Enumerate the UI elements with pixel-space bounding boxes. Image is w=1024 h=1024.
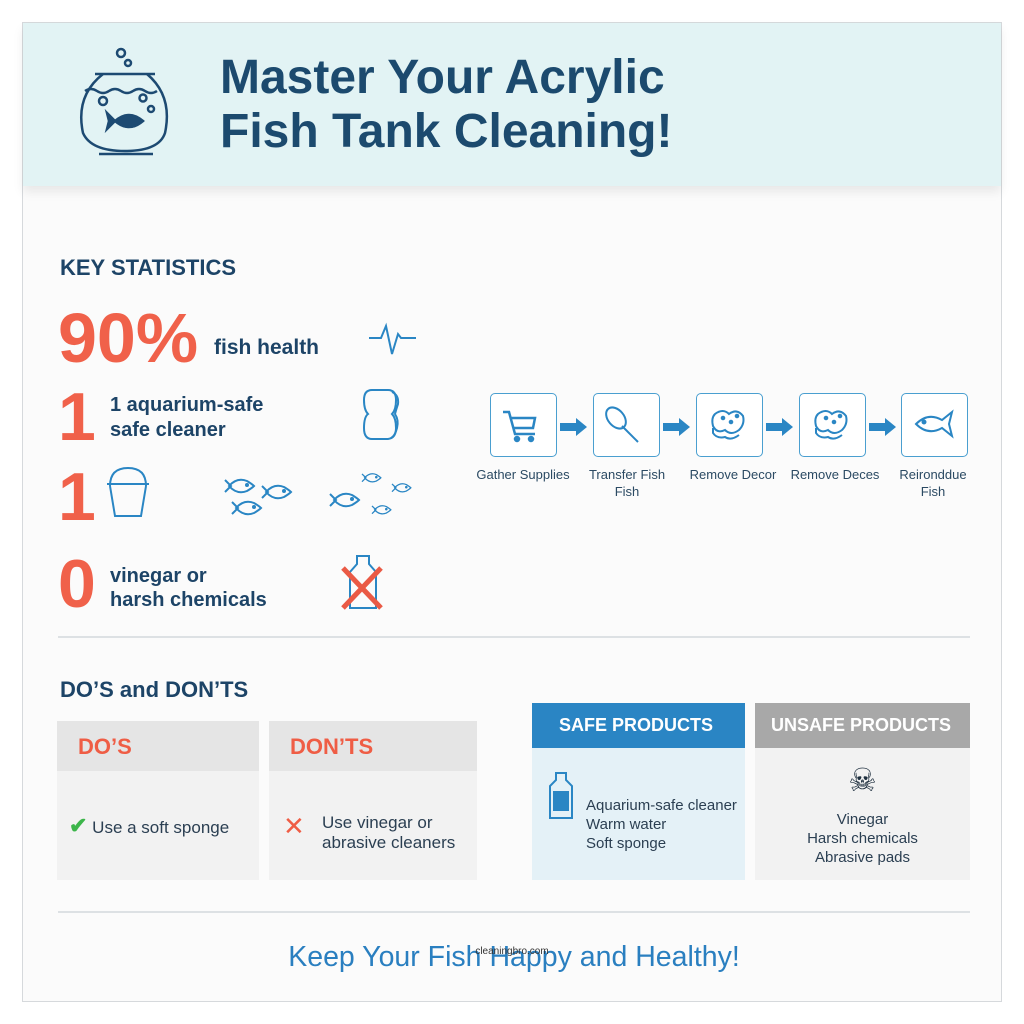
panel: unsafe products: UNSAFE PRODUCTS xyxy=(771,715,951,735)
panel: safe products: Soft sponge xyxy=(586,835,666,852)
stat: 0 vinegar: harsh chemicals xyxy=(110,589,267,611)
stat: 90%: 90% xyxy=(58,299,198,377)
stat: 1 bucket: 1 xyxy=(58,459,96,535)
stat: 0 vinegar xyxy=(58,546,267,622)
icon: bucket xyxy=(107,467,149,517)
heading: key statistics: KEY STATISTICS xyxy=(60,255,236,280)
panel: donts: Use vinegar or xyxy=(322,813,433,832)
process flow: Transfer Fish xyxy=(589,467,665,482)
icon: fish group xyxy=(224,473,412,516)
panel: donts: DON’TS xyxy=(290,734,373,759)
panel: unsafe products: Vinegar xyxy=(837,811,888,828)
process flow: Gather Supplies xyxy=(476,467,570,482)
stat: 90% xyxy=(58,299,319,377)
arrow xyxy=(766,418,793,436)
heading: dos and donts: DO’S and DON’TS xyxy=(60,677,248,702)
panel: safe products: Warm water xyxy=(586,816,666,833)
stat: 1 cleaner xyxy=(58,379,263,455)
stat: 1 cleaner: 1 xyxy=(58,379,96,455)
header banner xyxy=(23,23,1001,186)
arrow xyxy=(869,418,896,436)
icon: heartbeat xyxy=(369,322,416,354)
panel: unsafe products: Harsh chemicals xyxy=(807,830,918,847)
step 5 xyxy=(901,393,968,457)
title: Master Your Acrylic xyxy=(220,51,665,104)
panel: dos xyxy=(57,721,259,880)
title xyxy=(220,51,672,158)
panel: unsafe products xyxy=(755,703,970,880)
icon: crossed bottle xyxy=(341,555,383,610)
stat: 1 cleaner: 1 aquarium-safe xyxy=(110,394,263,416)
watermark: cleaningbro.com xyxy=(475,946,549,957)
step 1 xyxy=(490,393,557,457)
stat: 1 cleaner: safe cleaner xyxy=(110,419,226,441)
panel: unsafe products: Abrasive pads xyxy=(815,849,910,866)
process flow: Fish xyxy=(921,484,945,499)
panel: safe products: Aquarium-safe cleaner xyxy=(586,797,737,814)
panel: donts: ✕ xyxy=(283,811,305,841)
step 4 xyxy=(799,393,866,457)
footer tagline: Keep Your Fish Happy and Healthy! xyxy=(288,941,740,973)
step 2 xyxy=(593,393,660,457)
panel: safe products: SAFE PRODUCTS xyxy=(559,715,713,735)
panel: dos: ✔ Use a soft sponge xyxy=(69,813,229,838)
process flow: Reironddue xyxy=(899,467,967,482)
process flow: Remove Decor xyxy=(690,467,776,482)
panel: donts: abrasive cleaners xyxy=(322,833,455,852)
icon: fish bowl xyxy=(80,48,168,156)
icon: sponge xyxy=(363,389,400,440)
stat: 90%: fish health xyxy=(214,336,319,359)
panel: unsafe products: ☠ xyxy=(848,762,877,798)
arrow xyxy=(663,418,690,436)
stat: 0 vinegar: vinegar or xyxy=(110,565,207,587)
arrow xyxy=(560,418,587,436)
process flow xyxy=(476,393,968,499)
title: Fish Tank Cleaning! xyxy=(220,105,672,158)
panel: safe products xyxy=(532,703,745,880)
step 3 xyxy=(696,393,763,457)
panel: dos: DO’S xyxy=(78,734,132,759)
stat: 0 vinegar: 0 xyxy=(58,546,96,622)
panel: donts xyxy=(269,721,477,880)
process flow: Remove Deces xyxy=(791,467,879,482)
process flow: Fish xyxy=(615,484,639,499)
